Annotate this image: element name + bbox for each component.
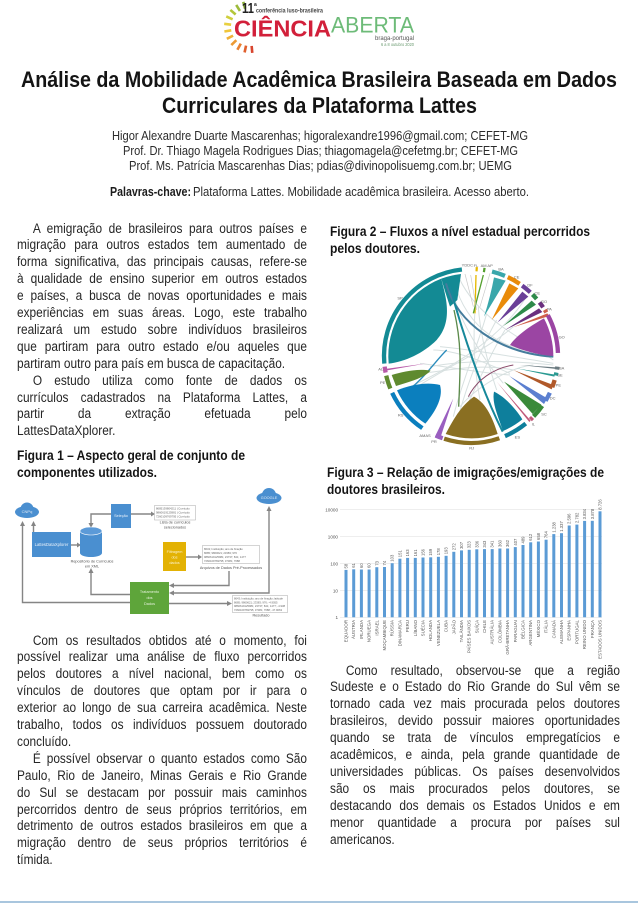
country labels: MÉXICO: [536, 619, 541, 637]
box: resultado: 7260109769795; 37381; 7688; -47.9063: [234, 608, 282, 612]
y axis labels: 10: [333, 588, 338, 594]
heading: figura 1: Figura 1 – Aspecto geral de conjunto de: [17, 448, 245, 463]
icon: google cloud: [256, 488, 282, 504]
value labels: 658: [536, 532, 541, 540]
figure 1: flow diagram: [15, 488, 288, 618]
y axis labels: 10000: [325, 508, 338, 512]
box: resultado: 9860619125981; 23737; 841; 1477; -4.938: [234, 604, 285, 608]
box: arquivos pré-processados: 8685; 9860621; 23383; 976: [204, 551, 237, 555]
text block: conclusion: [330, 662, 620, 847]
state labels: AM AP: [481, 263, 493, 268]
text block: introduction: LattesDataXplorer.: [16, 423, 115, 438]
value labels: 362: [505, 539, 510, 547]
state labels: PE: [380, 380, 386, 385]
state labels: AL: [378, 367, 384, 372]
value labels: 612: [528, 533, 533, 541]
heading: figura 2: pelos doutores.: [330, 241, 420, 256]
box: lattesdataxplorer: LattesDataXplorer: [35, 542, 69, 547]
value labels: 61: [351, 562, 356, 568]
value labels: [344, 499, 602, 568]
state labels: SE: [557, 372, 563, 377]
text block: introduction: e países, a busca de novas oportunidades e mais: [16, 288, 306, 303]
authors: Higor Alexandre Duarte Mascarenhas; higoralexandre1996@gmail.com; CEFET-MG: [112, 128, 528, 143]
text block: introduction: partir da extração efetuada pelo: [16, 406, 306, 421]
chord: pe: [392, 370, 431, 386]
box: tratamento dos dados: dos: [146, 596, 153, 600]
text block: results: Paulo, Rio de Janeiro, Minas Gerais e Rio Grande: [16, 768, 306, 783]
value labels: 156: [420, 548, 426, 556]
country labels: DINAMARCA: [397, 620, 402, 646]
value labels: 360: [497, 539, 502, 547]
value labels: 341: [490, 540, 495, 548]
arrows: [22, 510, 269, 604]
state labels: [378, 262, 565, 451]
value labels: 151: [397, 550, 402, 557]
box: lista de currículos: Lista de currículos: [160, 520, 191, 524]
text block: results: detrimento de outros estados brasileiros em que a: [16, 818, 306, 833]
conference logo: [224, 0, 414, 53]
text block: introduction: à qualidade de ensino superior em outros estados: [16, 271, 306, 286]
small state chords: [385, 273, 557, 439]
state labels: PE: [556, 382, 561, 387]
conference logo: 11: [242, 0, 254, 17]
value labels: 307: [459, 541, 464, 549]
y axis labels: 1: [335, 615, 338, 620]
figure 3: bar chart: [325, 499, 602, 659]
box: filtragem dos dados: dos: [171, 556, 178, 560]
keywords: Plataforma Lattes. Mobilidade acadêmica brasileira. Acesso aberto.: [193, 184, 529, 199]
country labels: CANADÁ: [551, 620, 556, 638]
y axis labels: 1000: [328, 534, 338, 540]
text block: results: pelos doutores a nível nacional, bem como os: [16, 666, 306, 681]
text block: results: vínculos de doutores que optam por ir para o: [16, 683, 306, 698]
value labels: 60: [367, 563, 372, 568]
country labels: SUÍÇA: [474, 620, 479, 633]
box: arquivos pré-processados: 7260109769795; 37381; 7688: [204, 559, 240, 563]
text block: results: É possível observar o quanto estados como São: [32, 751, 306, 766]
value labels: 336: [474, 540, 479, 548]
value labels: 159: [428, 548, 433, 556]
icon: google cloud: GOOGLE: [261, 496, 278, 500]
icon: repository cylinder: em XML: [85, 564, 99, 568]
conference logo: conferência luso-brasileira: [256, 8, 324, 14]
chord: sc: [494, 392, 522, 431]
value labels: 8.726: [598, 499, 602, 510]
outer ring arcs: [348, 233, 594, 479]
footer line: [0, 901, 638, 903]
box: tratamento dos dados: Tratamento: [140, 590, 159, 594]
country labels: COLÔMBIA: [497, 620, 502, 643]
text block: introduction: O estudo utiliza como fonte de dados os: [32, 373, 306, 388]
authors: [112, 128, 528, 173]
box: lista de currículos: 8685139804211 | Currículo: [156, 506, 190, 510]
box: seleção: Seleção: [114, 514, 128, 518]
country labels: ARGENTINA: [528, 620, 533, 646]
value labels: 161: [413, 549, 418, 556]
country labels: PORTUGAL: [574, 619, 579, 644]
box: lista de currículos: 7260109769795 | Currículo: [156, 514, 190, 518]
value labels: 2.782: [574, 512, 579, 523]
state labels: ES: [515, 435, 520, 440]
box: filtragem dos dados: [163, 542, 186, 571]
country labels: REINO UNIDO: [582, 619, 587, 649]
country labels: [344, 619, 602, 659]
country labels: VENEZUELA: [436, 620, 441, 646]
value labels: 103: [390, 554, 395, 562]
box: tratamento dos dados: Dados: [144, 602, 155, 606]
country labels: HOLANDA: [428, 620, 433, 641]
state labels: PA: [547, 307, 552, 312]
country labels: ISRAEL: [374, 619, 379, 636]
text block: results: concluído.: [16, 734, 71, 749]
value labels: 193: [444, 547, 449, 554]
text block: results: exterior ao longo de sua carreira acadêmica. Neste: [16, 700, 306, 715]
bars: [344, 511, 602, 617]
country labels: FRANÇA: [590, 620, 595, 638]
country labels: MOÇAMBIQUE: [382, 620, 387, 650]
box: arquivos pré-processados: Arquivos de Dados Pré-Processados: [200, 566, 262, 570]
country labels: ALEMANHA: [559, 620, 564, 644]
state labels: AMAS: [419, 433, 431, 438]
chord: rs: [397, 384, 441, 424]
state labels: BA: [498, 267, 504, 272]
value labels: 74: [382, 560, 387, 566]
text block: results: do Sul se destacam por possuir mais caminhos: [16, 785, 306, 800]
value labels: 3.878: [590, 508, 595, 519]
value labels: 178: [436, 548, 441, 555]
box: arquivos pré-processados: 9860619125981; 23737; 841; 1477: [204, 555, 246, 559]
figure 2: chord diagram: [378, 262, 565, 451]
box: tratamento dos dados: [130, 582, 169, 614]
country labels: GRÃ-BRETANHA: [505, 620, 510, 655]
value labels: 489: [520, 536, 526, 544]
text block: introduction: [16, 220, 307, 438]
box: resultado: 8685; 9860621; 23383; 976; -4.9055: [234, 600, 278, 604]
chord: go: [510, 318, 553, 356]
country labels: IRLANDA: [359, 620, 364, 639]
title: [21, 67, 617, 118]
box: arquivos pré-processados: 8643; Instituição; ano de ﬁnação: [204, 547, 243, 551]
country labels: LÍBANO: [413, 619, 418, 636]
country labels: CHILE: [482, 620, 487, 633]
text block: conclusion: americanos.: [330, 832, 395, 847]
country labels: PAÍSES BAIXOS: [467, 620, 472, 653]
text block: conclusion: Como resultado, observou-se que a região: [346, 662, 620, 678]
country labels: ESPANHA: [567, 620, 572, 641]
value labels: 323: [467, 541, 472, 548]
value labels: 1.238: [551, 521, 556, 533]
state labels: SP: [397, 295, 403, 300]
text block: introduction: realizará um estudo sobre indivíduos brasileiros: [16, 322, 306, 337]
y axis labels: 100: [330, 562, 338, 566]
text block: conclusion: são os mais procurados pelos doutores, se: [330, 781, 620, 796]
state labels: GO: [559, 335, 565, 340]
heading: figura 1: componentes utilizados.: [17, 465, 157, 480]
box: lattesdataxplorer: [32, 532, 71, 557]
country labels: AUSTRÁLIA: [490, 620, 495, 644]
text block: conclusion: universidades públicas. Os países desenvolvidos: [330, 764, 620, 779]
conference logo: a: [254, 2, 257, 8]
text block: introduction: migração para outros estados tem aumentado de: [16, 237, 306, 252]
chord ribbons: [403, 280, 553, 423]
box: resultado: Resultado: [252, 614, 270, 618]
icon: cnpq cloud: CNPq: [22, 509, 32, 514]
country labels: SUÉCIA: [420, 620, 426, 636]
box: lista de currículos: 9860619125981 | Currículo: [156, 510, 190, 514]
value labels: 407: [513, 538, 518, 546]
box: resultado: [232, 596, 288, 618]
value labels: 163: [405, 549, 410, 556]
country labels: TAILÂNDIA: [459, 620, 464, 642]
text block: results: percorridos dentro de seus próprios territórios, em: [16, 802, 306, 817]
text block: conclusion: tornado cada vez mais procurada pelos doutores: [330, 696, 620, 711]
heading: figura 3: doutores brasileiros.: [327, 482, 445, 497]
state labels: GO: [541, 299, 547, 304]
authors: Prof. Dr. Thiago Magela Rodrigues Dias; thiagomagela@cefetmg.br; CEFET-MG: [123, 143, 518, 158]
value labels: 343: [482, 540, 487, 548]
heading: figura 2: Figura 2 – Fluxos a nível estadual percorridos: [330, 224, 590, 239]
box: lista de currículos: selecionados: [164, 526, 186, 530]
box: lista de currículos: [154, 506, 196, 530]
grid lines: [340, 510, 602, 617]
text block: introduction: forma significativa, das principais causas, refere-se: [16, 254, 306, 269]
keywords: Palavras-chave:: [110, 184, 191, 199]
conference logo: ABERTA: [331, 12, 414, 38]
text block: results: migração dentro de seus próprios territórios é: [16, 835, 306, 850]
country labels: EQUADOR: [344, 620, 348, 642]
country labels: ITÁLIA: [544, 620, 549, 633]
value labels: 2.596: [567, 513, 572, 524]
box: resultado: 8643; Instituição; ano de ﬁnação; latitude: [234, 596, 283, 600]
chord: rj: [446, 397, 498, 438]
text block: conclusion: menor quantidade a procura por países sul: [330, 815, 620, 830]
text block: introduction: partiram outro para país em busca de capacitação.: [16, 356, 285, 371]
country labels: ESTADOS UNIDOS: [598, 620, 602, 659]
text block: results: tímida.: [16, 852, 52, 867]
state labels: RJ: [469, 446, 474, 451]
state labels: PR: [431, 439, 437, 444]
country labels: PERU: [405, 620, 410, 632]
text block: conclusion: destacando dos demais os Estados Unidos e em: [330, 798, 620, 813]
state labels: CE: [514, 275, 520, 280]
value labels: 3.834: [582, 508, 587, 519]
state labels: SC: [541, 411, 547, 416]
text block: introduction: currículos cadastrados na Plataforma Lattes, a: [16, 390, 306, 405]
conference logo: 6 a 8 outubro 2020: [381, 42, 414, 47]
state labels: CE: [535, 291, 540, 296]
icon: cnpq cloud: [15, 502, 39, 518]
country labels: ÁUSTRIA: [351, 620, 356, 639]
text block: conclusion: brasileiros, devido possuir maiores oportunidades: [330, 713, 620, 728]
text block: conclusion: Sudeste e o Estado do Rio Grande do Sul vêm se: [330, 679, 620, 694]
state labels: FL: [474, 263, 479, 268]
heading: figura 1: [17, 448, 245, 480]
country labels: CUBA: [444, 620, 449, 632]
country labels: JAPÃO: [451, 619, 456, 634]
state labels: BA: [559, 366, 565, 371]
text block: introduction: experiências em suas áreas. Logo, este trabalho: [16, 305, 306, 320]
chord: sp: [388, 279, 447, 364]
icon: repository cylinder: [71, 527, 114, 568]
text block: conclusion: acadêmicos, e ainda, pela grande quantidade de: [330, 747, 620, 762]
text block: introduction: que partiram para outro estado e/ou aqueles que: [16, 339, 306, 354]
authors: Prof. Ms. Patrícia Mascarenhas Dias; pdias@divinopolisuemg.com.br; UEMG: [129, 158, 512, 173]
box: filtragem dos dados: dados: [169, 561, 180, 565]
text block: results: Com os resultados obtidos até o momento, foi: [32, 632, 306, 648]
heading: figura 2: [330, 224, 590, 256]
country labels: NORUEGA: [367, 620, 372, 642]
state labels: DC: [550, 396, 556, 401]
country labels: BÉLGICA: [520, 620, 526, 639]
icon: sun rays: [224, 2, 252, 53]
country labels: PARAGUAI: [513, 620, 518, 642]
value labels: 1.337: [559, 521, 564, 532]
value labels: 58: [344, 563, 348, 568]
text block: results: trabalho, todos os indivíduos possuem doutorado: [16, 717, 306, 732]
box: seleção: [111, 504, 131, 528]
text block: results: possível realizar uma análise de fluxo percorridos: [16, 649, 306, 664]
value labels: 764: [544, 531, 549, 538]
text block: conclusion: quando se trata de vínculos empregatícios e: [330, 730, 620, 745]
value labels: 272: [451, 543, 456, 550]
country labels: RÚSSIA: [390, 620, 395, 636]
state labels: IL: [532, 421, 536, 426]
conference logo: braga-portugal: [375, 36, 414, 42]
y axis labels: [325, 508, 338, 620]
text block: introduction: A emigração de brasileiros para outros países e: [32, 220, 306, 236]
state labels: DF: [527, 282, 533, 287]
heading: figura 3: Figura 3 – Relação de imigrações/emigrações de: [327, 465, 604, 480]
value labels: 60: [359, 563, 364, 568]
value labels: 73: [374, 560, 379, 566]
conference logo: CIÊNCIA: [234, 14, 331, 42]
heading: figura 3: [327, 465, 604, 497]
box: filtragem dos dados: Filtragem: [167, 550, 182, 554]
text block: results: [16, 632, 307, 867]
icon: repository cylinder: Repositório de Currículos: [71, 560, 114, 564]
box: arquivos pré-processados: [200, 546, 262, 570]
state labels: RS: [398, 412, 404, 417]
title: Curriculares da Plataforma Lattes: [162, 93, 477, 118]
state labels: YDDC: [462, 262, 473, 267]
